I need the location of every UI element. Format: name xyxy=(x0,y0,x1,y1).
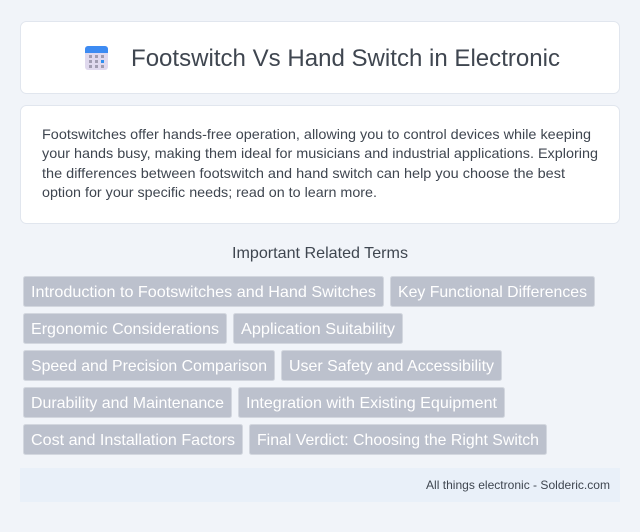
section heading: Important Related Terms xyxy=(232,245,408,262)
tag: cost: Cost and Installation Factors xyxy=(31,432,235,449)
tag: application xyxy=(234,314,402,344)
tags xyxy=(24,276,594,454)
tag: ergonomic xyxy=(24,314,226,344)
tag: key functional differences xyxy=(390,276,594,306)
title: Footswitch Vs Hand Switch in Electronic xyxy=(131,45,560,72)
tag: integration xyxy=(238,388,504,418)
footer text: All things electronic - Solderic.com xyxy=(426,478,610,492)
intro panel xyxy=(20,106,620,224)
tag: cost xyxy=(24,424,242,454)
tag: speed: Speed and Precision Comparison xyxy=(31,358,267,375)
intro text: option for your specific needs; read on to learn more. xyxy=(42,184,377,200)
tag: introduction: Introduction to Footswitches and Hand Switches xyxy=(31,284,376,301)
tag: integration: Integration with Existing Equipment xyxy=(246,395,498,412)
tag: key functional differences: Key Functional Differences xyxy=(398,284,587,301)
tag: final verdict xyxy=(250,424,546,454)
tag: durability: Durability and Maintenance xyxy=(31,395,224,412)
intro text: your hands busy, making them ideal for musicians and industrial applications. Exploring xyxy=(42,145,598,161)
header panel xyxy=(20,22,620,94)
tag: safety xyxy=(282,350,502,380)
intro text: the differences between footswitch and hand switch can help you choose the best xyxy=(42,165,565,181)
tag: ergonomic: Ergonomic Considerations xyxy=(31,321,219,338)
tag: safety: User Safety and Accessibility xyxy=(289,358,494,375)
tag: introduction xyxy=(24,276,384,306)
icon: calendar xyxy=(85,46,108,70)
tag: final verdict: Final Verdict: Choosing the Right Switch xyxy=(257,432,539,449)
footer xyxy=(20,468,620,502)
intro text xyxy=(42,126,598,200)
tag: durability xyxy=(24,388,232,418)
tag: application: Application Suitability xyxy=(241,321,395,338)
tag: speed xyxy=(24,350,274,380)
intro text: Footswitches offer hands-free operation, allowing you to control devices while keeping xyxy=(42,126,591,142)
